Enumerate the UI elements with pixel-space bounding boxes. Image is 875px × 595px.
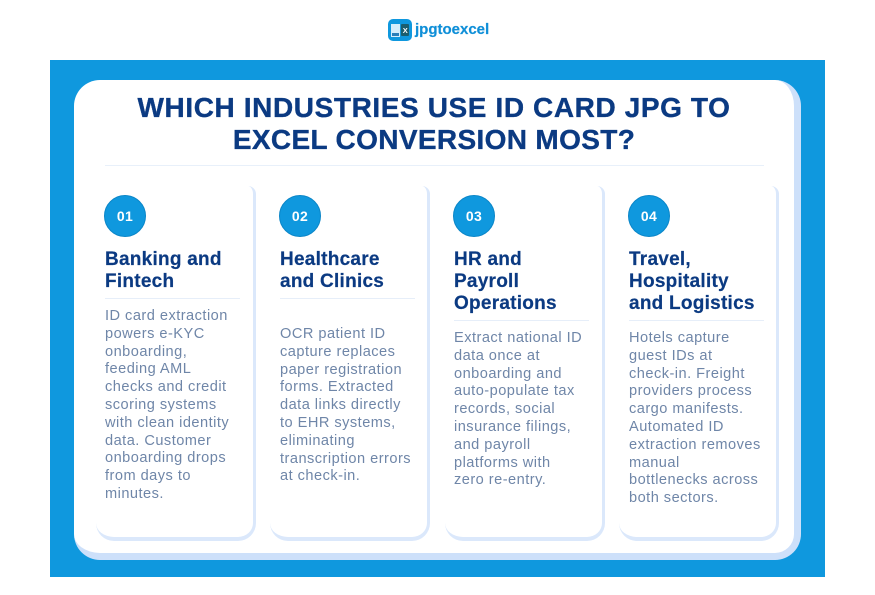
text: healthcare: at check-in. [280,468,360,484]
text: healthcare: forms. Extracted [280,379,394,395]
icon: jpg to excel [388,19,412,41]
text: travel: guest IDs at [629,348,713,364]
title: EXCEL CONVERSION MOST? [233,124,635,155]
card 1 [96,186,256,541]
text: healthcare: capture replaces [280,344,395,360]
heading: HR: Operations [454,293,557,314]
text: travel: Hotels capture [629,330,730,346]
text: HR: records, social [454,401,555,417]
card 3 [445,186,605,541]
text: banking: with clean identity [105,415,229,431]
number 04: 04 [641,208,657,224]
text: travel: extraction removes [629,437,761,453]
text: HR: data once at [454,348,540,364]
text: healthcare: transcription errors [280,451,411,467]
text: travel: check-in. Freight [629,366,745,382]
logo [388,19,489,41]
card 4 [619,186,779,541]
heading: HR: HR and [454,249,522,270]
title [137,92,730,155]
blue background panel [50,60,825,577]
text: HR: and payroll [454,437,531,453]
title: WHICH INDUSTRIES USE ID CARD JPG TO [138,92,730,123]
white main panel [74,80,801,560]
text: travel: both sectors. [629,490,719,506]
text: travel: manual [629,455,680,471]
heading: healthcare [280,249,384,292]
text: banking: feeding AML [105,361,191,377]
text: HR: onboarding and [454,366,562,382]
text: HR: platforms with [454,455,551,471]
text: healthcare: eliminating [280,433,355,449]
text: HR: auto-populate tax [454,383,575,399]
heading: travel: Travel, [629,249,691,270]
text: banking: from days to [105,468,191,484]
number 02 [279,195,321,237]
heading: banking: Banking and [105,249,222,270]
card 2 [270,186,430,541]
number 02: 02 [292,208,308,224]
number 03 [453,195,495,237]
text: travel: bottlenecks across [629,472,758,488]
text: travel: Automated ID [629,419,724,435]
icon: jpg to excel: X [403,26,408,35]
text: banking: checks and credit [105,379,227,395]
text: HR: zero re-entry. [454,472,546,488]
text: healthcare: paper registration [280,362,402,378]
text: travel: cargo manifests. [629,401,744,417]
text: banking: data. Customer [105,433,211,449]
text: healthcare: to EHR systems, [280,415,396,431]
text: banking: ID card extraction [105,308,228,324]
number 01: 01 [117,208,133,224]
text: banking [105,308,229,502]
heading: banking [105,249,222,292]
text: healthcare: OCR patient ID [280,326,386,342]
number 01 [104,195,146,237]
text: banking: onboarding drops [105,450,226,466]
number 04 [628,195,670,237]
logo wordmark: jpgtoexcel [415,21,489,38]
text: HR: insurance filings, [454,419,571,435]
heading: banking: Fintech [105,271,174,292]
heading: healthcare: and Clinics [280,271,384,292]
number 03: 03 [466,208,482,224]
text: banking: scoring systems [105,397,217,413]
text: banking: onboarding, [105,344,187,360]
divider [105,165,764,166]
heading: HR: Payroll [454,271,519,292]
heading: healthcare: Healthcare [280,249,380,270]
heading: travel: Hospitality [629,271,729,292]
heading: travel [629,249,755,314]
text: healthcare [280,326,411,484]
text: travel: providers process [629,383,752,399]
text: banking: minutes. [105,486,164,502]
text: HR: Extract national ID [454,330,582,346]
heading: HR [454,249,557,314]
text: healthcare: data links directly [280,397,401,413]
text: HR [454,330,582,488]
text: banking: powers e-KYC [105,326,205,342]
text: travel [629,330,761,506]
heading: travel: and Logistics [629,293,755,314]
